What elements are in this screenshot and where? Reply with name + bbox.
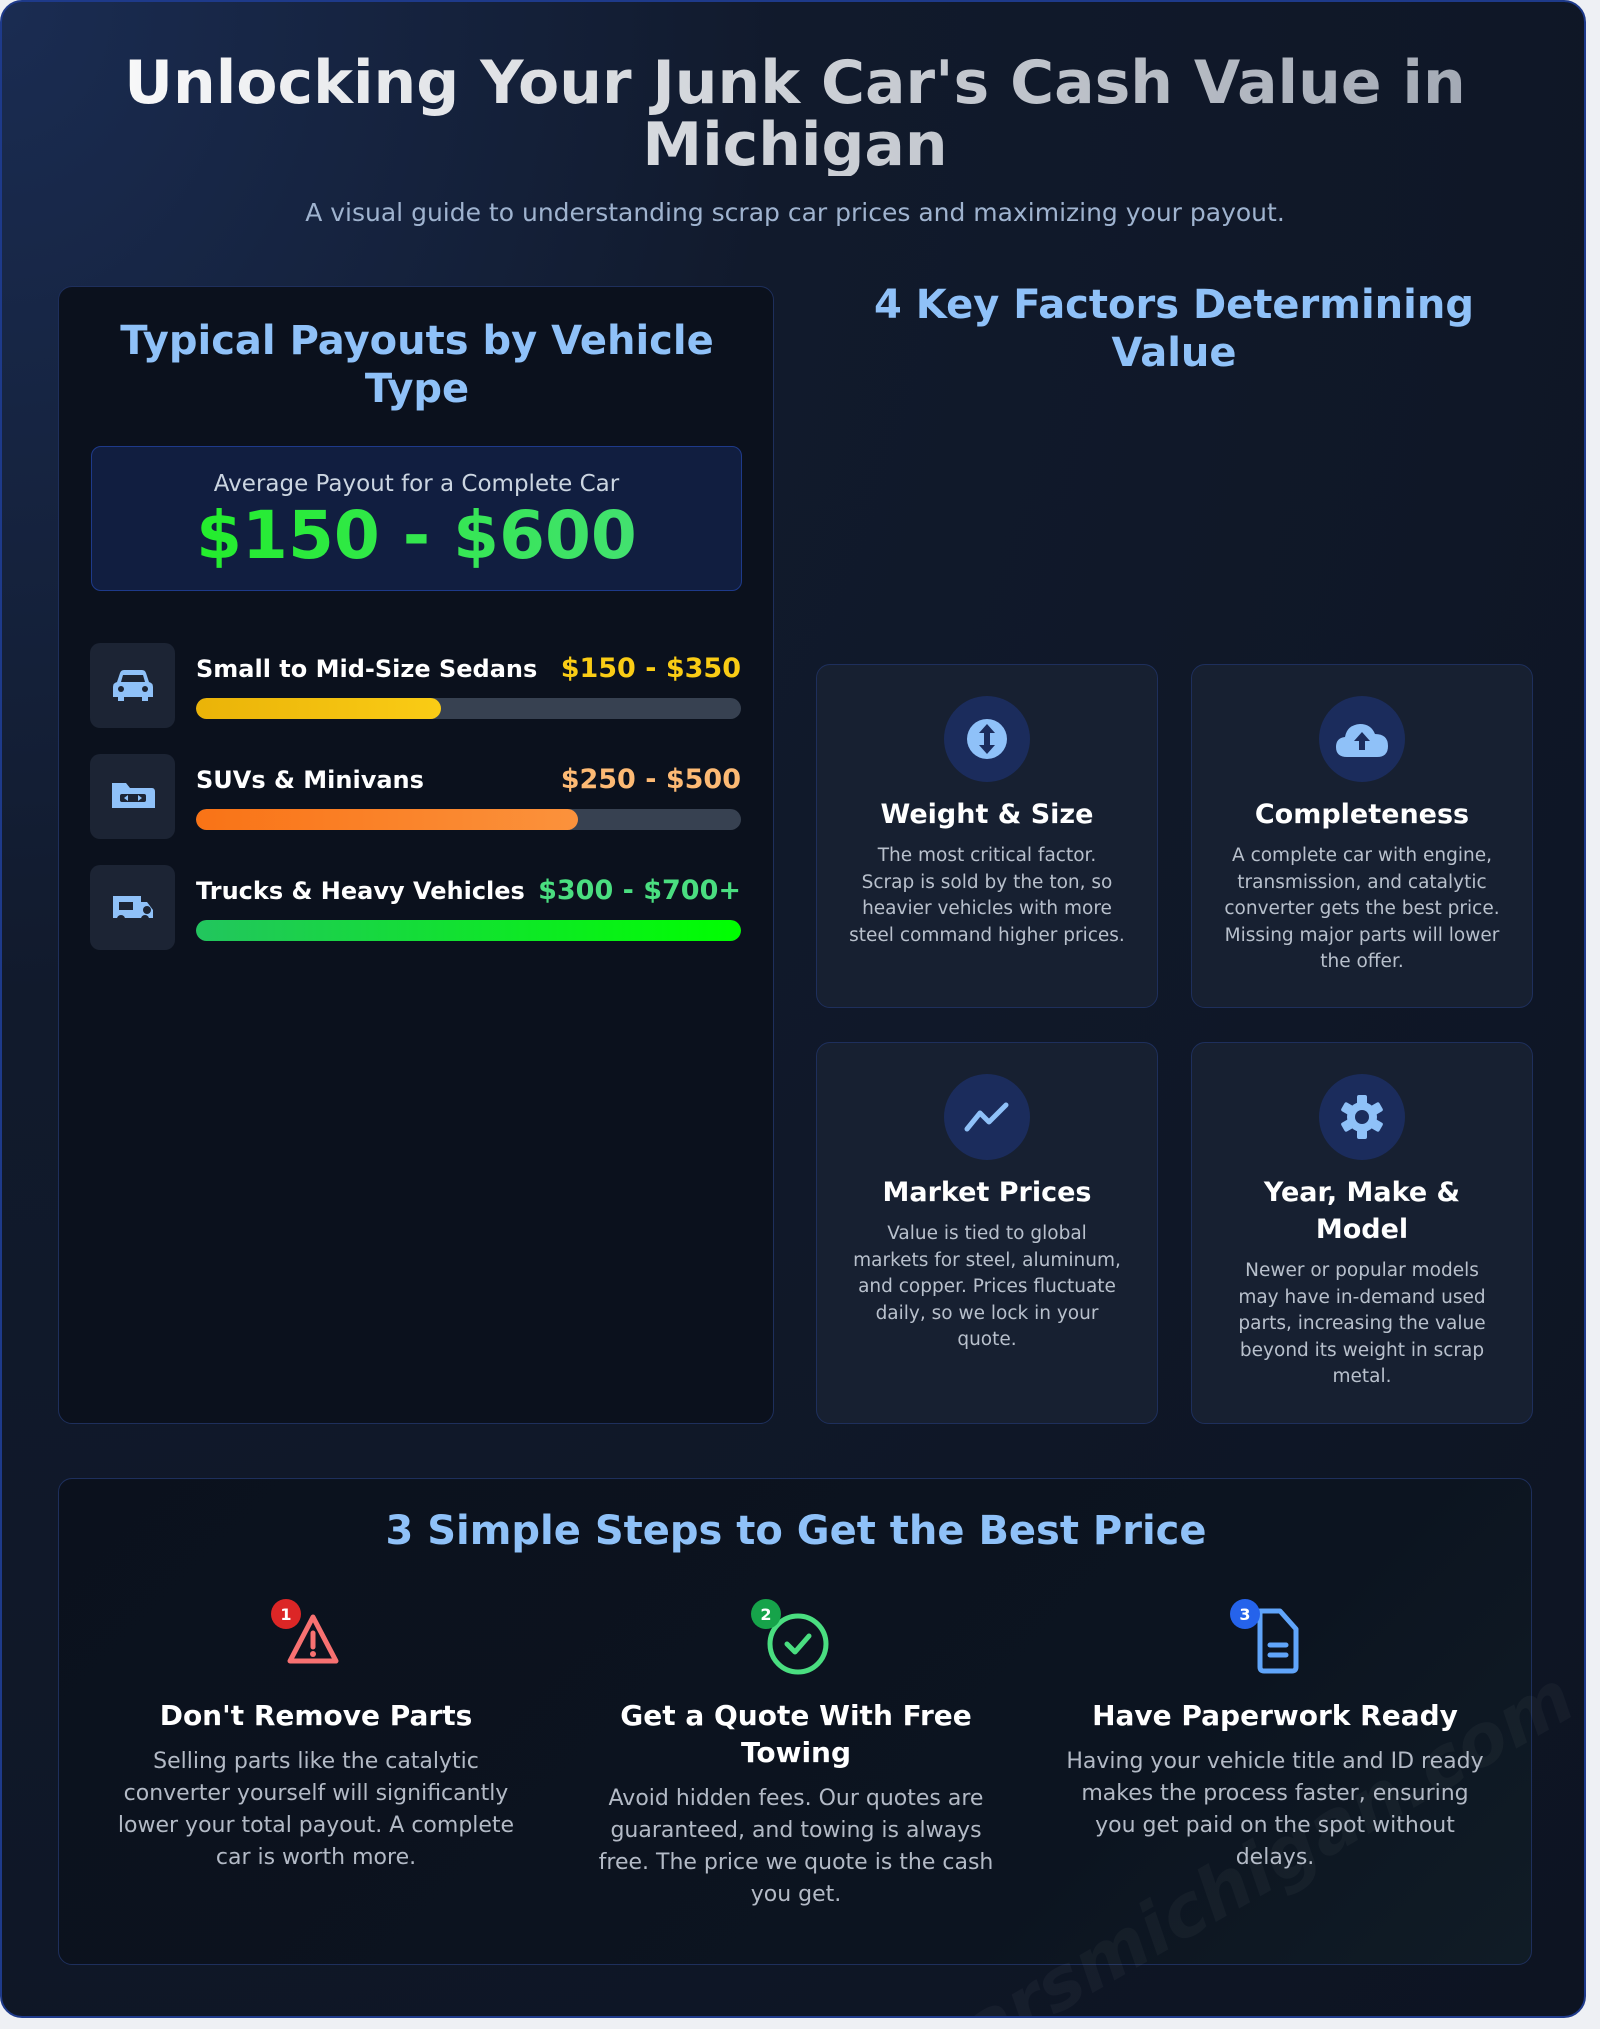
factor card: market: Value is tied to global markets for steel, aluminum, and copper. Prices fluctuate daily, so we lock in your quote. bbox=[853, 1223, 1121, 1350]
step 3: Having your vehicle title and ID ready makes the process faster, ensuring you get paid on the spot without delays. bbox=[1066, 1749, 1484, 1870]
icon: warning bbox=[271, 1599, 338, 1664]
factor card: year make model: Year, Make & bbox=[1264, 1177, 1460, 1208]
row: sedans bbox=[90, 643, 741, 728]
row: suvs bbox=[90, 754, 741, 839]
factor card: completeness bbox=[1191, 664, 1533, 1008]
step 3: Have Paperwork Ready bbox=[1092, 1699, 1458, 1732]
step 2: Get a Quote With Free bbox=[620, 1699, 972, 1732]
average payout box: Average Payout for a Complete Car bbox=[214, 471, 619, 497]
step 2: Avoid hidden fees. Our quotes are guaranteed, and towing is always free. The price we quote is the cash you get. bbox=[599, 1786, 993, 1907]
factor card: market bbox=[816, 1042, 1158, 1424]
icon: document: 3 bbox=[1239, 1604, 1251, 1624]
panel: 3 steps bbox=[58, 1478, 1532, 1965]
step 2: Towing bbox=[741, 1736, 851, 1769]
heading: typical payouts bbox=[120, 318, 714, 412]
heading: 4 key factors: 4 Key Factors Determining bbox=[874, 282, 1474, 328]
step 1: Don't Remove Parts bbox=[160, 1699, 472, 1732]
bar: sedans bbox=[196, 698, 741, 719]
heading: 3 steps: 3 Simple Steps to Get the Best Price bbox=[385, 1508, 1207, 1554]
row: trucks: $300 - $700+ bbox=[538, 875, 741, 906]
heading: typical payouts: Type bbox=[365, 366, 469, 412]
row: sedans: $150 - $350 bbox=[561, 653, 741, 684]
row: trucks bbox=[90, 865, 741, 950]
heading: 4 key factors bbox=[874, 282, 1474, 376]
icon: chart line bbox=[944, 1074, 1030, 1160]
icon: warning: 1 bbox=[280, 1604, 292, 1624]
factor card: weight: Weight & Size bbox=[881, 799, 1093, 830]
row: sedans: Small to Mid-Size Sedans bbox=[196, 655, 537, 683]
factor card: year make model: Model bbox=[1316, 1214, 1408, 1245]
factor card: completeness: Completeness bbox=[1255, 799, 1469, 830]
bar: trucks bbox=[196, 920, 741, 941]
factor card: weight: The most critical factor. Scrap is sold by the ton, so heavier vehicles with more steel command higher prices. bbox=[849, 845, 1125, 946]
factor card: market: Market Prices bbox=[882, 1177, 1092, 1208]
row: suvs: SUVs & Minivans bbox=[196, 766, 424, 794]
factor card: year make model bbox=[1191, 1042, 1533, 1424]
bar: suvs bbox=[196, 809, 741, 830]
title: Unlocking Your Junk Car's Cash Value in bbox=[124, 48, 1466, 118]
icon: gear bbox=[1319, 1074, 1405, 1160]
icon: truck bbox=[90, 865, 175, 950]
step 2 bbox=[599, 1599, 993, 1907]
title bbox=[2, 52, 1588, 176]
icon: check: 2 bbox=[760, 1604, 772, 1624]
step 3 bbox=[1066, 1599, 1484, 1870]
step 1 bbox=[118, 1599, 514, 1870]
icon: cloud upload bbox=[1319, 696, 1405, 782]
factor card: weight bbox=[816, 664, 1158, 1008]
icon: document bbox=[1230, 1599, 1298, 1674]
average payout box: $150 - $600 bbox=[196, 497, 637, 574]
heading: typical payouts: Typical Payouts by Vehicle bbox=[120, 318, 714, 364]
step 1: Selling parts like the catalytic converter yourself will significantly lower your total payout. A complete car is worth more. bbox=[118, 1749, 514, 1870]
icon: weight bbox=[944, 696, 1030, 782]
factor card: year make model: Newer or popular models may have in-demand used parts, increasing the value beyond its weight in scrap metal. bbox=[1238, 1260, 1486, 1387]
average payout box bbox=[91, 446, 742, 591]
panel: typical payouts bbox=[58, 286, 774, 1424]
subtitle: A visual guide to understanding scrap car prices and maximizing your payout. bbox=[305, 198, 1285, 227]
icon: car bbox=[90, 643, 175, 728]
row: trucks: Trucks & Heavy Vehicles bbox=[196, 877, 525, 905]
factor card: completeness: A complete car with engine, transmission, and catalytic converter gets the best price. Missing major parts will lower the offer. bbox=[1224, 845, 1500, 972]
icon: suv bbox=[90, 754, 175, 839]
row: suvs: $250 - $500 bbox=[561, 764, 741, 795]
heading: 4 key factors: Value bbox=[1111, 330, 1237, 376]
title: Michigan bbox=[642, 110, 948, 180]
icon: check bbox=[751, 1599, 828, 1674]
